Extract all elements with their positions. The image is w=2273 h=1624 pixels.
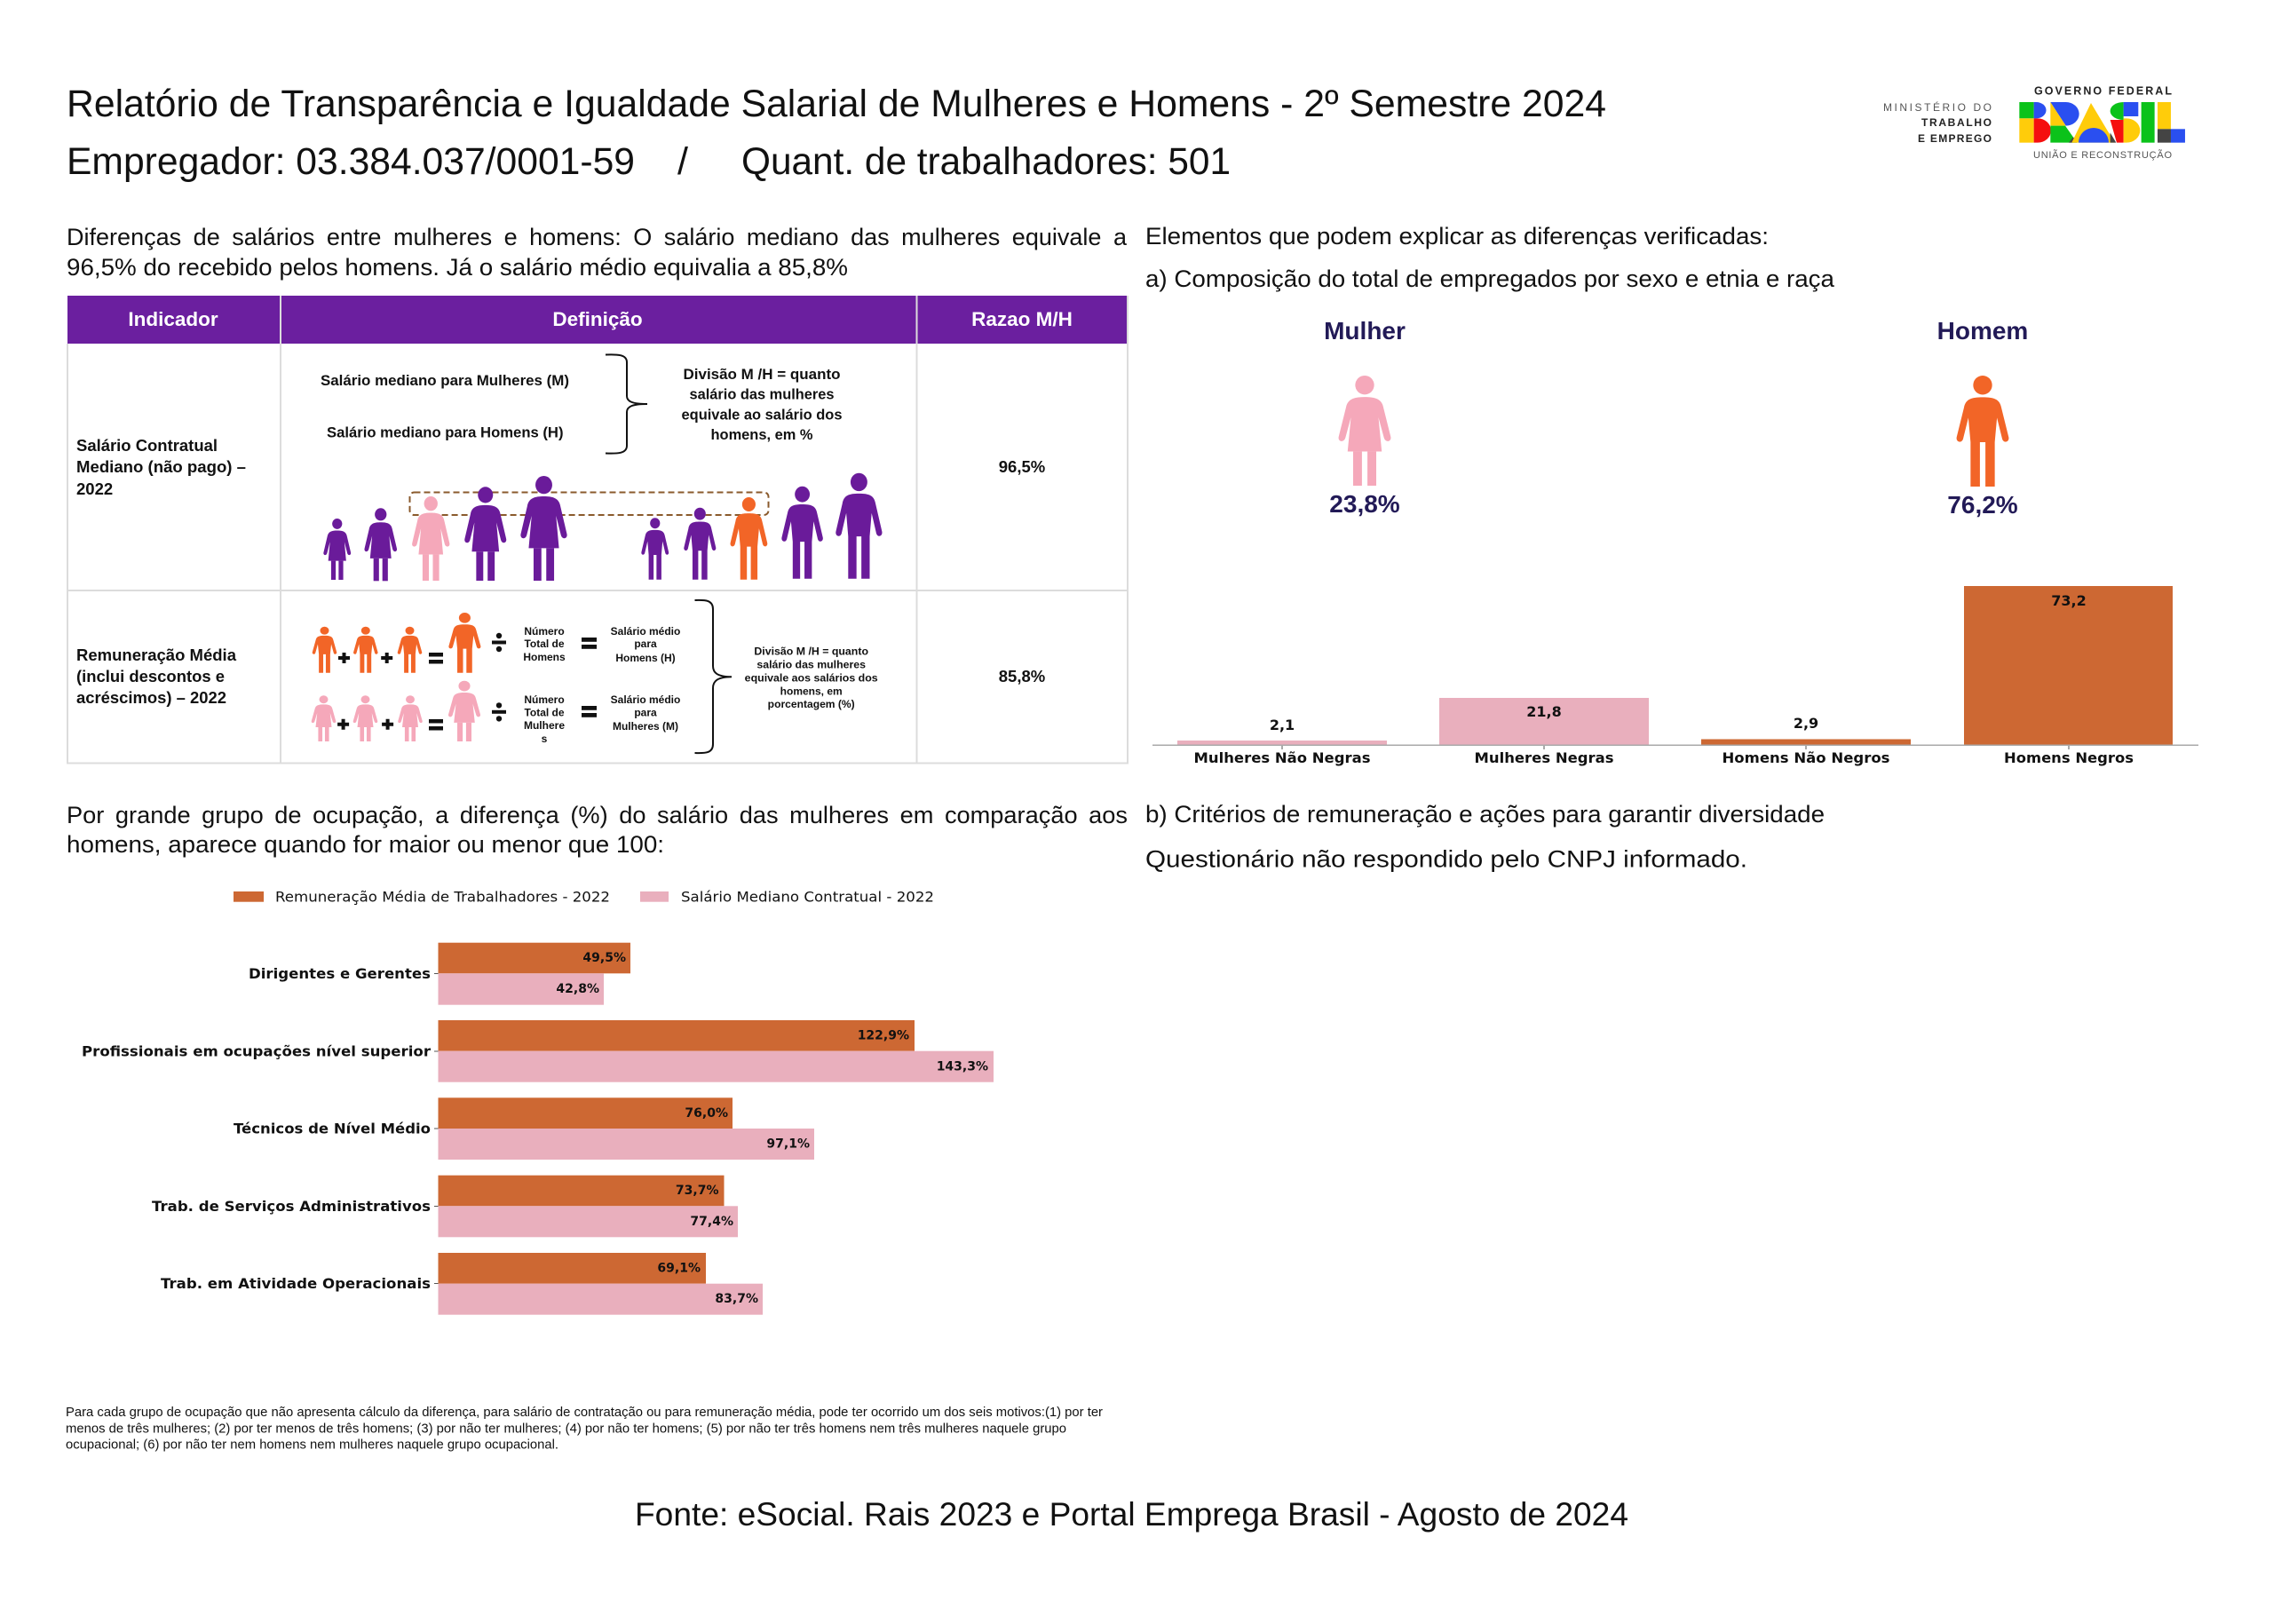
definição: salário mediano: salário das mulheres <box>689 385 835 403</box>
heading: homem: Homem <box>1937 317 2028 345</box>
logo: ministério e governo federal: UNIÃO E RECONSTRUÇÃO <box>2033 149 2172 161</box>
footnote <box>66 1406 1103 1453</box>
group: atividade operacionais: 83,7% <box>715 1292 758 1306</box>
value: razão remuneração média: 85,8% <box>999 667 1045 685</box>
group: serviços administrativos: Trab. de Serviços Administrativos <box>152 1198 431 1215</box>
group: serviços administrativos: 77,4% <box>690 1215 733 1229</box>
logo: ministério e governo federal: GOVERNO FEDERAL <box>2034 85 2172 98</box>
group: atividade operacionais <box>161 1253 763 1315</box>
text block: elementos que podem explicar: Elementos que podem explicar as diferenças verificadas: <box>1145 223 1769 250</box>
definição: remuneração média mulheres <box>312 681 680 745</box>
value: mulher: 23,8% <box>1329 490 1400 518</box>
text block: grande grupo de ocupação <box>67 802 1128 858</box>
row label: salário contratual mediano <box>76 436 246 498</box>
definição: remuneração média mulheres: Número <box>524 693 565 706</box>
value: razão salário mediano: 96,5% <box>999 457 1045 476</box>
table header: Indicador <box>128 308 218 330</box>
definição: divisão M/H remuneração <box>694 600 878 753</box>
panel: tabela de indicadores <box>67 296 1129 764</box>
title: Quant. de trabalhadores: 501 <box>741 140 1231 183</box>
text block: critérios de remuneração: b) Critérios de remuneração e ações para garantir diversidade <box>1145 801 1825 828</box>
text block: diferenças de salários: 96,5% do recebido pelos homens. Já o salário médio equivalia a 85,8% <box>67 254 848 281</box>
group: serviços administrativos: 73,7% <box>676 1184 719 1198</box>
definição: divisão M/H remuneração: equivale aos salários dos <box>745 673 878 684</box>
definição: divisão M/H remuneração: porcentagem (%) <box>768 700 855 710</box>
group: atividade operacionais: Trab. em Atividade Operacionais <box>161 1275 431 1292</box>
group: profissionais nível superior: 143,3% <box>937 1060 988 1074</box>
legend: Salário Mediano Contratual - 2022 <box>681 888 934 906</box>
definição: remuneração média homens: Total de <box>524 638 565 650</box>
title <box>67 83 1606 183</box>
definição: salário mediano: homens, em % <box>710 426 813 443</box>
row label: remuneração média: Remuneração Média <box>76 646 237 664</box>
definição: salário mediano: Divisão M /H = quanto <box>684 366 840 383</box>
legend <box>234 888 934 906</box>
logo: ministério e governo federal: TRABALHO <box>1921 116 1992 129</box>
definição: remuneração média homens: Número <box>524 625 565 638</box>
definição: remuneração média homens: Homens (H) <box>615 652 676 664</box>
definição: remuneração média mulheres: Mulheres (M) <box>613 720 678 733</box>
row label: remuneração média: acréscimos) – 2022 <box>76 688 226 707</box>
group: técnicos de nível médio <box>234 1097 814 1160</box>
definição: divisão M/H remuneração: salário das mulheres <box>756 661 866 671</box>
bar chart: sexo e raça: Mulheres Não Negras <box>1193 749 1371 766</box>
group: técnicos de nível médio: 76,0% <box>685 1106 728 1121</box>
text block: elementos que podem explicar <box>1145 223 1835 292</box>
text block: critérios de remuneração: Questionário não respondido pelo CNPJ informado. <box>1145 845 1747 872</box>
pictograma: mulheres e homens ordenados por salário <box>323 473 882 581</box>
definição: remuneração média homens: Homens <box>523 651 566 663</box>
title: Relatório de Transparência e Igualdade Salarial de Mulheres e Homens - 2º Semestre 2024 <box>67 83 1606 125</box>
source: Fonte: eSocial. Rais 2023 e Portal Emprega Brasil - Agosto de 2024 <box>635 1496 1628 1533</box>
row label: salário contratual mediano: Mediano (não pago) – <box>76 457 246 476</box>
row label: remuneração média <box>76 646 237 707</box>
footnote: menos de três mulheres; (2) por ter menos de três homens; (3) por não ter mulheres; (4) por não ter homens; (5) por não ter três homens nem três mulheres naquele grupo <box>66 1422 1066 1437</box>
footnote: Para cada grupo de ocupação que não apresenta cálculo da diferença, para salário de contratação ou para remuneração média, pode ter ocorrido um dos seis motivos:(1) por ter <box>66 1406 1103 1420</box>
logo: ministério e governo federal <box>1883 85 2185 161</box>
row label: salário contratual mediano: Salário Contratual <box>76 436 218 455</box>
bar chart: sexo e raça: 73,2 <box>2051 592 2087 609</box>
row label: remuneração média: (inclui descontos e <box>76 667 225 685</box>
definição: remuneração média homens: para <box>634 638 657 650</box>
group: profissionais nível superior: Profissionais em ocupações nível superior <box>82 1042 431 1060</box>
definição: remuneração média mulheres: Mulhere <box>524 719 565 732</box>
bar chart: sexo e raça <box>1152 586 2198 766</box>
bar chart: sexo e raça: Mulheres Negras <box>1474 749 1614 766</box>
definição: salário mediano: equivale ao salário dos <box>682 407 842 423</box>
group: dirigentes e gerentes: Dirigentes e Gerentes <box>249 965 431 982</box>
title: Empregador: 03.384.037/0001-59 <box>67 140 635 183</box>
text block: critérios de remuneração <box>1145 801 1825 872</box>
bar chart: grupos de ocupação <box>82 943 994 1315</box>
legend: Remuneração Média de Trabalhadores - 2022 <box>275 888 610 906</box>
value: homem: 76,2% <box>1947 491 2018 519</box>
group: dirigentes e gerentes: 49,5% <box>582 951 626 965</box>
definição: remuneração média mulheres: s <box>542 733 548 745</box>
group: atividade operacionais: 69,1% <box>657 1261 701 1275</box>
title: / <box>677 140 688 183</box>
group: dirigentes e gerentes: 42,8% <box>556 982 599 996</box>
table header: Razao M/H <box>971 308 1073 330</box>
logo: ministério e governo federal: E EMPREGO <box>1918 132 1992 145</box>
definição: remuneração média mulheres: Salário médio <box>611 693 680 706</box>
bar chart: sexo e raça: 2,9 <box>1794 715 1818 732</box>
definição: salário mediano: Salário mediano para Homens (H) <box>327 424 563 440</box>
definição: salário mediano: Salário mediano para Mulheres (M) <box>321 372 569 389</box>
group: dirigentes e gerentes <box>249 943 630 1005</box>
text block: diferenças de salários: Diferenças de salários entre mulheres e homens: O salário mediano das mulheres equivale a <box>67 224 1128 250</box>
definição: salário mediano <box>321 354 842 454</box>
icon: mulher <box>1339 376 1390 486</box>
footnote: ocupacional; (6) por não ter nem homens nem mulheres naquele grupo ocupacional. <box>66 1438 558 1453</box>
definição: divisão M/H remuneração: homens, em <box>780 687 843 698</box>
group: serviços administrativos <box>152 1176 738 1237</box>
bar chart: sexo e raça: 2,1 <box>1270 717 1295 733</box>
table header: Definição <box>552 308 643 330</box>
row label: salário contratual mediano: 2022 <box>76 479 113 498</box>
definição: remuneração média homens <box>313 613 680 673</box>
table header <box>67 296 1128 344</box>
icon: homem <box>1957 376 2008 487</box>
text block: grande grupo de ocupação: homens, aparece quando for maior ou menor que 100: <box>67 831 664 858</box>
definição: remuneração média mulheres: para <box>634 707 657 719</box>
group: profissionais nível superior: 122,9% <box>858 1028 909 1042</box>
definição: remuneração média homens: Salário médio <box>611 625 680 638</box>
bar chart: sexo e raça: 21,8 <box>1526 703 1562 720</box>
logo: ministério e governo federal: MINISTÉRIO DO <box>1883 100 1992 114</box>
text block: grande grupo de ocupação: Por grande grupo de ocupação, a diferença (%) do salário das mulheres em comparação aos <box>67 802 1128 828</box>
panel: composição por sexo <box>1324 317 2028 519</box>
group: profissionais nível superior <box>82 1020 994 1082</box>
group: técnicos de nível médio: 97,1% <box>766 1137 810 1151</box>
text block: diferenças de salários <box>67 224 1128 281</box>
group: técnicos de nível médio: Técnicos de Nível Médio <box>234 1121 431 1137</box>
definição: divisão M/H remuneração: Divisão M /H = quanto <box>754 646 868 657</box>
bar chart: sexo e raça: Homens Negros <box>2004 749 2134 766</box>
bar chart: sexo e raça: Homens Não Negros <box>1723 749 1889 766</box>
text block: elementos que podem explicar: a) Composição do total de empregados por sexo e etnia e raça <box>1145 265 1835 292</box>
definição: remuneração média mulheres: Total de <box>524 707 565 719</box>
heading: mulher: Mulher <box>1324 317 1406 345</box>
